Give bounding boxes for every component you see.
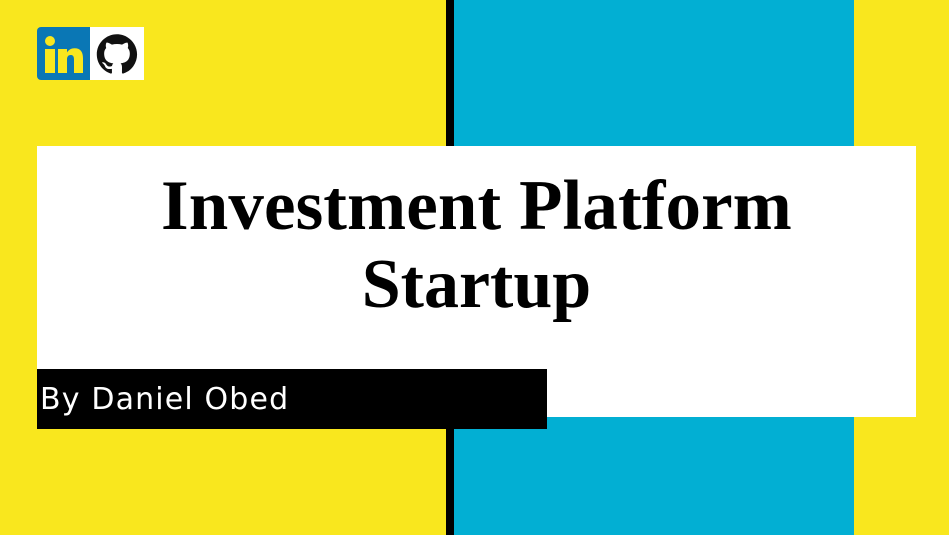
author banner: By Daniel Obed <box>40 382 289 417</box>
icon: GitHub <box>90 27 144 80</box>
icon: LinkedIn <box>37 27 90 80</box>
title line 2: Startup <box>362 246 591 323</box>
panel: cyan background band <box>454 0 854 535</box>
black vertical stripe <box>446 0 454 535</box>
title line 1: Investment Platform <box>161 167 792 245</box>
author banner <box>37 369 547 429</box>
panel: white title card <box>37 146 916 417</box>
